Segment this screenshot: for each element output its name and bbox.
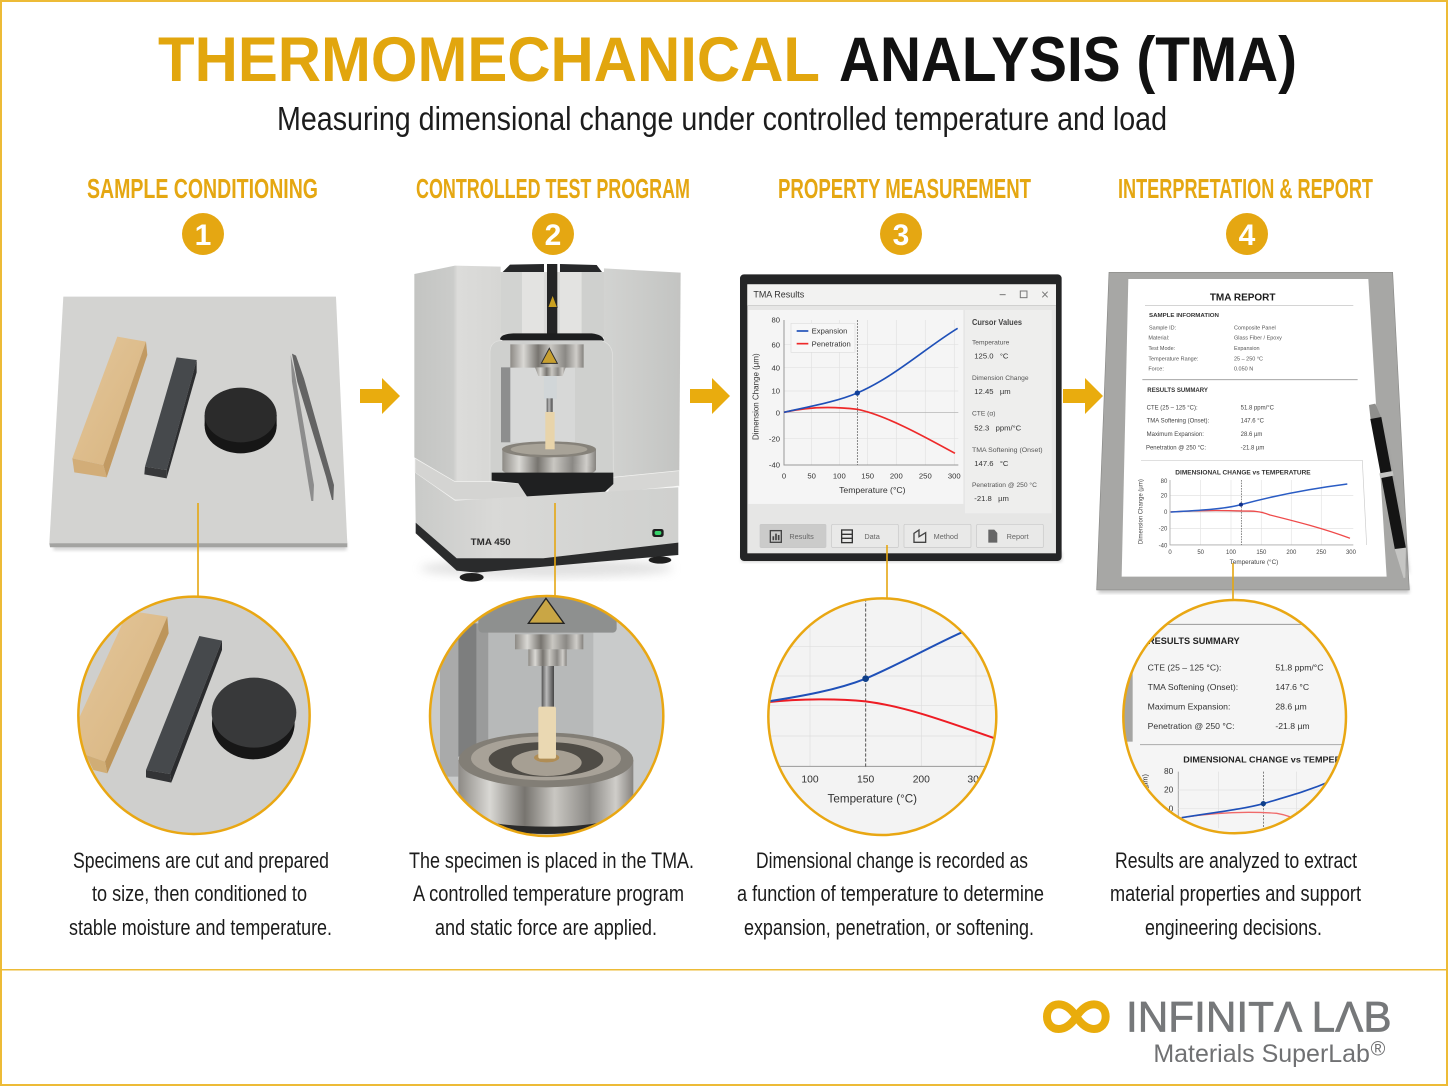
results chart: 250 — [919, 471, 932, 480]
tagline: Materials SuperLab — [1153, 1040, 1370, 1068]
connector 1 — [197, 503, 199, 597]
report header: TMA REPORT — [1210, 292, 1275, 303]
wordmark: INFINITΛ LΛB — [1126, 993, 1392, 1040]
cursor values: CTE (α) — [972, 411, 995, 418]
results summary: TMA Softening (Onset): — [1147, 419, 1210, 425]
magnified circle 4: results summary: DIMENSIONAL CHANGE vs TEMPERATURE — [1183, 756, 1372, 765]
title — [158, 25, 1297, 95]
cursor values: Penetration @ 250 °C — [972, 481, 1037, 489]
results chart: 80 — [771, 316, 780, 325]
results summary: Maximum Expansion: — [1147, 432, 1204, 438]
number badge 1 — [182, 213, 224, 255]
magnified circle 4: results summary: 28.6 µm — [1275, 701, 1307, 711]
results summary: Penetration @ 250 °C: — [1146, 446, 1206, 452]
subtitle: Measuring dimensional change under controlled temperature and load — [277, 100, 1167, 137]
report chart: -20 — [1159, 527, 1168, 533]
caption 2 — [409, 848, 694, 940]
magnified circle 4: results summary: RESULTS SUMMARY — [1148, 636, 1240, 646]
magnified circle 4: results summary: 147.6 °C — [1275, 682, 1309, 692]
panel: TMA 450 instrument — [414, 264, 681, 582]
arrow 3 to 4 — [1063, 378, 1103, 414]
tab buttons — [760, 524, 1043, 548]
sample information: Sample ID: — [1149, 326, 1177, 332]
report chart: 0 — [1168, 550, 1172, 556]
report chart: 100 — [1226, 550, 1237, 556]
report chart: DIMENSIONAL CHANGE vs TEMPERATURE — [1175, 470, 1311, 476]
number badge 2: 2 — [545, 219, 561, 252]
sample information: Test Mode: — [1148, 346, 1176, 352]
instrument head — [500, 264, 604, 345]
tab buttons: Results — [789, 532, 814, 541]
results chart: -20 — [769, 434, 780, 443]
results summary: 147.6 °C — [1241, 419, 1265, 425]
magnified circle 4: results summary: 0 — [1169, 804, 1174, 814]
results summary — [1146, 388, 1275, 452]
instrument left panel — [414, 266, 501, 483]
cursor values: Cursor Values — [972, 318, 1022, 327]
window title bar: TMA Results — [753, 290, 805, 300]
magnified circle 4: results summary: (µm) — [1140, 774, 1149, 789]
cursor values — [965, 310, 1052, 513]
report chart: Dimension Change (µm) — [1139, 479, 1145, 544]
arrow 2 to 3 — [690, 378, 730, 414]
arrow 1 to 2 — [360, 378, 400, 414]
results summary: CTE (25 – 125 °C): — [1147, 406, 1198, 412]
results chart: 0 — [782, 471, 786, 480]
results chart: 60 — [771, 340, 780, 349]
magnified circle 3: curve detail: 200 — [913, 775, 930, 786]
sample information: Expansion — [1234, 346, 1260, 352]
sample stage — [458, 733, 633, 834]
results summary: RESULTS SUMMARY — [1147, 388, 1208, 394]
magnified circle 4: results summary: 51.8 ppm/°C — [1275, 663, 1324, 673]
logo: Infinita Lab — [1047, 993, 1392, 1068]
panel: TMA report on clipboard — [1097, 272, 1410, 593]
magnified circle 4: results summary: TMA Softening (Onset): — [1148, 682, 1238, 692]
caption 1 — [69, 848, 332, 940]
sample information: 25 – 250 °C — [1234, 356, 1263, 362]
cursor values: TMA Softening (Onset) — [972, 447, 1043, 454]
results chart: Temperature (°C) — [839, 485, 906, 495]
disc specimen — [205, 388, 277, 453]
step 2 heading: CONTROLLED TEST PROGRAM — [416, 173, 690, 204]
caption 3: Dimensional change is recorded as — [756, 848, 1028, 873]
cursor values: 12.45 µm — [974, 387, 1011, 396]
cursor values: 147.6 °C — [974, 459, 1009, 468]
report chart: 50 — [1197, 550, 1205, 556]
results chart: 0 — [776, 408, 780, 417]
report chart: -40 — [1159, 543, 1168, 549]
caption 1: stable moisture and temperature. — [69, 915, 332, 940]
magnified circle 1: specimens — [77, 597, 310, 834]
magnified circle 4: results summary: 20 — [1164, 784, 1174, 794]
results summary: 51.8 ppm/°C — [1241, 406, 1275, 412]
caption 2: A controlled temperature program — [413, 881, 684, 906]
magnified circle 3: curve detail: 150 — [857, 775, 875, 786]
cursor values: -21.8 µm — [974, 494, 1009, 503]
title: ANALYSIS (TMA) — [839, 25, 1297, 95]
results chart: 150 — [861, 471, 874, 480]
magnified circle 3: curve detail: 100 — [801, 775, 819, 786]
instrument mid band — [415, 458, 528, 500]
magnified circle 3: curve detail — [760, 597, 1005, 840]
report chart: 20 — [1161, 494, 1168, 500]
tab buttons: Data — [864, 532, 881, 541]
magnified circle 4: results summary: 80 — [1164, 766, 1174, 776]
magnified circle 4: results summary: Penetration @ 250 °C: — [1148, 721, 1235, 731]
model label: TMA 450 — [471, 537, 511, 547]
report chart: 80 — [1161, 479, 1168, 485]
caption 2: The specimen is placed in the TMA. — [409, 848, 694, 873]
instrument lower front — [415, 473, 678, 558]
magnified circle 3: curve detail: Temperature (°C) — [828, 793, 917, 806]
report chart: 150 — [1256, 550, 1267, 556]
feet — [460, 556, 671, 582]
number badge 4: 4 — [1239, 219, 1256, 252]
results chart: 200 — [890, 471, 903, 480]
caption 4: Results are analyzed to extract — [1115, 848, 1357, 873]
caption 1: Specimens are cut and prepared — [73, 848, 329, 873]
report chart: 250 — [1316, 550, 1327, 556]
number badge 3: 3 — [893, 219, 909, 252]
cursor values: Temperature — [972, 340, 1010, 347]
caption 1: to size, then conditioned to — [92, 881, 307, 906]
icon: infinity symbol — [1047, 1004, 1106, 1029]
report chart: 0 — [1164, 510, 1168, 516]
report chart: 200 — [1286, 550, 1297, 556]
results chart: 10 — [771, 387, 780, 396]
wooden specimen — [72, 337, 147, 477]
number badge 1: 1 — [195, 219, 211, 252]
magnified circle 2: specimen in stage — [427, 590, 670, 840]
results chart: 40 — [771, 364, 780, 373]
magnified circle 4: results summary: Maximum Expansion: — [1148, 701, 1230, 711]
panel: TMA results tablet — [740, 274, 1062, 562]
step 3 heading: PROPERTY MEASUREMENT — [778, 173, 1031, 204]
pen — [1369, 404, 1410, 578]
results chart: 50 — [807, 471, 816, 480]
results summary: 28.6 µm — [1241, 432, 1262, 438]
connector 2 — [554, 503, 556, 598]
specimen — [538, 707, 556, 759]
power led — [652, 529, 664, 537]
magnified circle 4: results summary: -21.8 µm — [1275, 721, 1310, 731]
caption 3 — [737, 848, 1044, 940]
sample information: 0.050 N — [1234, 367, 1253, 373]
results chart: -40 — [769, 461, 780, 470]
caption 2: and static force are applied. — [435, 915, 657, 940]
cursor values: Dimension Change — [972, 375, 1029, 382]
window title bar — [747, 284, 1056, 306]
sample information — [1148, 313, 1282, 373]
connector 4 — [1232, 563, 1234, 600]
results chart: Dimension Change (µm) — [751, 353, 760, 440]
tweezers — [291, 354, 334, 501]
magnified circle 3: curve detail: 300 — [967, 775, 985, 786]
caption 3: expansion, penetration, or softening. — [744, 915, 1034, 940]
sample information: Material: — [1148, 336, 1170, 342]
magnified circle 4: results summary — [1122, 598, 1348, 834]
results chart: 300 — [948, 471, 961, 480]
sample information: Temperature Range: — [1148, 356, 1199, 362]
dark bar specimen — [144, 357, 197, 478]
report chart: 300 — [1346, 550, 1357, 556]
results chart — [748, 310, 963, 504]
tagline: ® — [1371, 1039, 1386, 1061]
number badge 3 — [880, 213, 922, 255]
connector 3 — [886, 545, 888, 599]
step 1 heading: SAMPLE CONDITIONING — [87, 173, 318, 204]
tab buttons: Report — [1007, 532, 1029, 541]
magnified circle 4: results summary: CTE (25 – 125 °C): — [1148, 663, 1221, 673]
cursor values: 52.3 ppm/°C — [974, 423, 1022, 432]
caption 4: material properties and support — [1110, 881, 1361, 906]
chamber opening — [490, 341, 613, 482]
report chart — [1139, 470, 1357, 566]
tab buttons: Method — [934, 532, 958, 541]
results chart: 100 — [833, 471, 846, 480]
sample information: Force: — [1148, 367, 1164, 373]
report chart: Temperature (°C) — [1230, 558, 1278, 566]
results summary: -21.8 µm — [1241, 446, 1264, 452]
probe head — [515, 634, 583, 707]
sample information: Glass Fiber / Epoxy — [1234, 336, 1282, 342]
sample information: SAMPLE INFORMATION — [1149, 313, 1219, 319]
panel: sample plate with specimens — [49, 297, 347, 550]
title: THERMOMECHANICAL — [158, 25, 820, 95]
number badge 2 — [532, 213, 574, 255]
number badge 4 — [1226, 213, 1268, 255]
cursor values: 125.0 °C — [974, 352, 1009, 361]
sample information: Composite Panel — [1234, 326, 1276, 332]
instrument right panel — [604, 268, 681, 478]
results chart: Penetration — [812, 339, 851, 348]
caption 4 — [1110, 848, 1361, 940]
upper block with warning label — [478, 597, 617, 633]
caption 3: a function of temperature to determine — [737, 881, 1044, 906]
results chart: Expansion — [812, 327, 847, 336]
caption 4: engineering decisions. — [1145, 915, 1322, 940]
